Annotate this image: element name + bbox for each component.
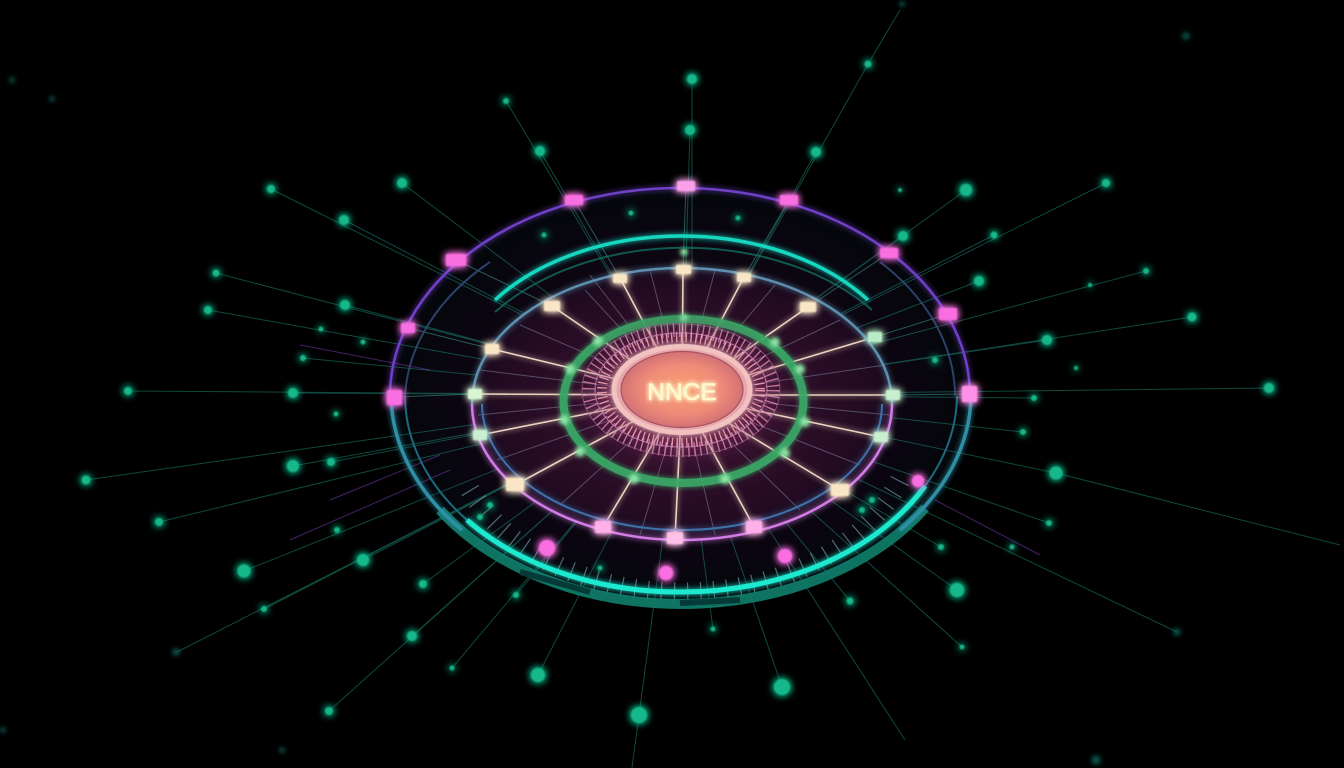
title: core label: NNCE [647,379,717,406]
core disc [621,352,743,428]
ring: upper teal arc [495,236,872,312]
ring: outer purple [390,188,970,396]
thin outer spokes [394,186,969,397]
panel: inner ring interior [473,269,891,539]
purple connector lines [290,345,1040,555]
core halo [574,314,790,466]
outer ring magenta nodes [387,181,977,580]
thin inner spokes [478,270,890,535]
ring: outer teal lower [391,396,971,604]
ring: green [559,248,810,484]
bright spokes [475,269,893,538]
panel: outer ring interior [391,190,969,602]
core tick rings [582,324,780,456]
green ring nodes [559,248,810,484]
tick ring: outer lower [470,480,900,593]
core ring [614,346,750,432]
outer green nodes [82,60,1274,723]
ring: inner blue and pink [472,268,892,540]
inner ring square nodes [468,265,900,544]
